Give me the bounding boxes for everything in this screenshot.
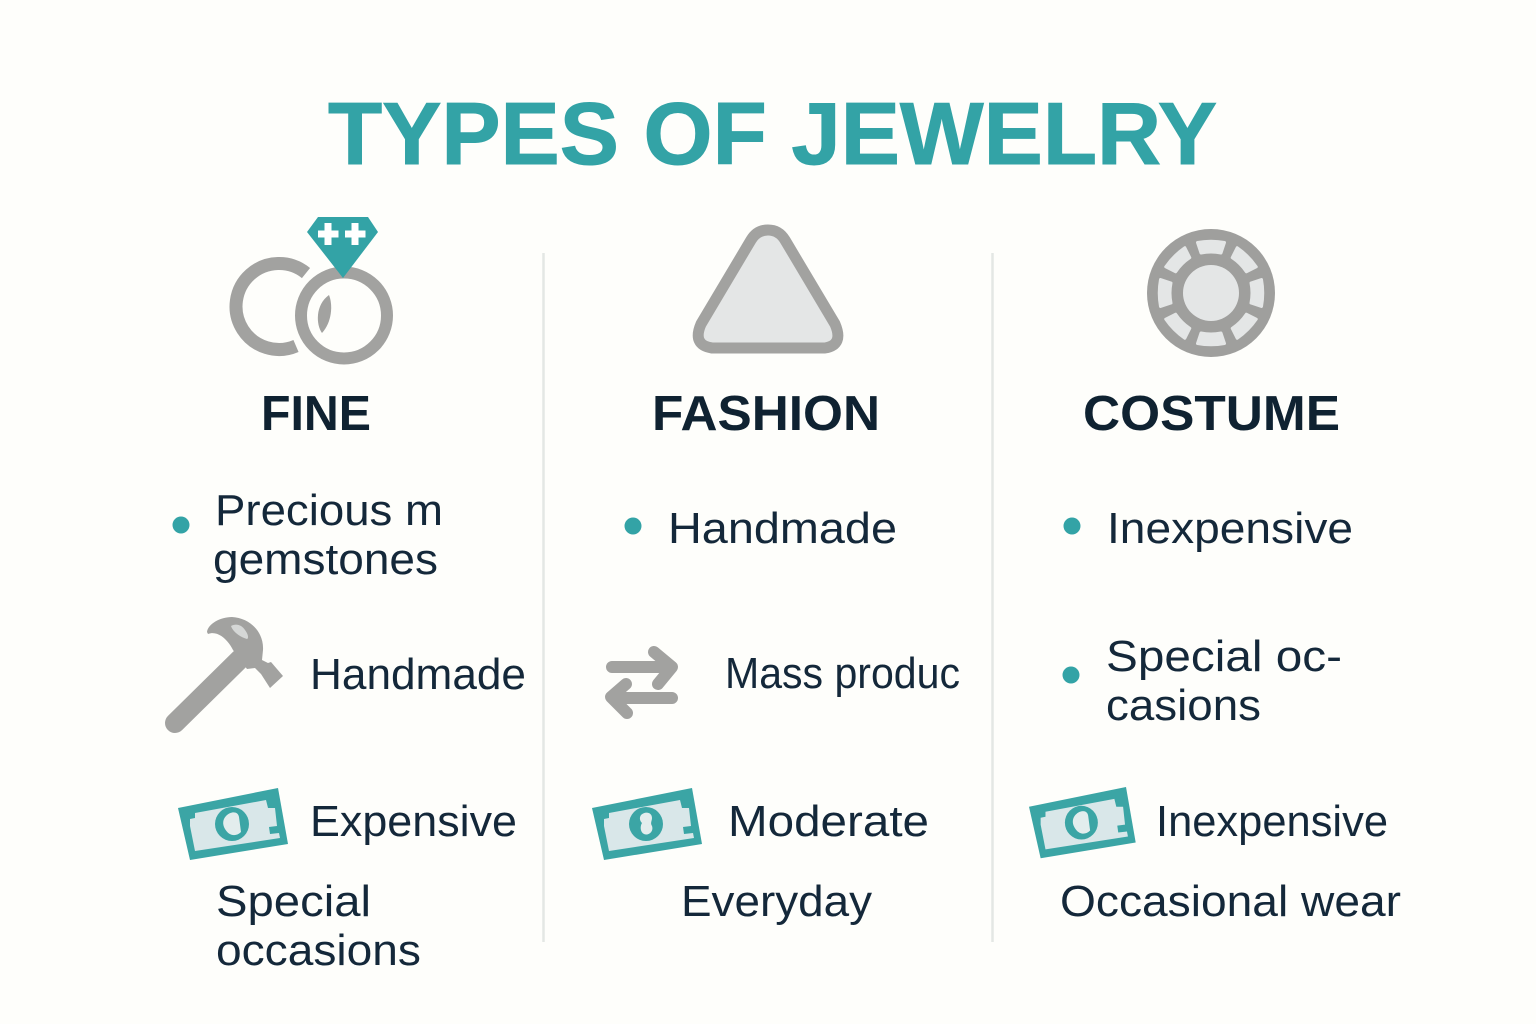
heading: costume: COSTUME bbox=[1083, 387, 1340, 441]
icon: triangle bbox=[698, 230, 838, 348]
text: casions: casions bbox=[1106, 681, 1261, 730]
panel: costume bbox=[1029, 229, 1401, 926]
text: special oc-: Special oc- bbox=[1106, 632, 1342, 681]
text: occasional wear: Occasional wear bbox=[1060, 877, 1401, 926]
title: TYPES OF JEWELRY bbox=[328, 84, 1217, 183]
text: inexpensive: Inexpensive bbox=[1156, 797, 1388, 846]
icon: gem wheel bbox=[1147, 229, 1275, 357]
icon: banknote bbox=[1029, 787, 1136, 858]
panel: fashion bbox=[592, 230, 960, 926]
icon: hammer bbox=[175, 617, 283, 723]
text: everyday: Everyday bbox=[681, 877, 872, 926]
text: gemstones: gemstones bbox=[213, 535, 438, 584]
bullet bbox=[172, 516, 190, 534]
text: special: Special bbox=[216, 877, 371, 926]
text: inexpensive: Inexpensive bbox=[1107, 504, 1353, 553]
text: mass produc: Mass produc bbox=[725, 649, 960, 698]
bullet bbox=[1062, 666, 1080, 684]
text: occasions: occasions bbox=[216, 926, 421, 975]
bullet bbox=[1064, 518, 1080, 534]
text: handmade: Handmade bbox=[310, 650, 526, 699]
panel: fine bbox=[172, 217, 526, 975]
icon: banknote bbox=[178, 788, 288, 860]
bullet bbox=[624, 518, 642, 534]
heading: fine: FINE bbox=[261, 387, 371, 441]
icon: banknote bbox=[592, 788, 702, 860]
heading: fashion: FASHION bbox=[652, 387, 880, 441]
text: precious m: Precious m bbox=[215, 486, 443, 535]
icon: rings with diamond bbox=[236, 217, 387, 358]
text: moderate: Moderate bbox=[728, 797, 929, 846]
text: expensive: Expensive bbox=[310, 797, 517, 846]
text: handmade: Handmade bbox=[668, 504, 897, 553]
icon: swap arrows bbox=[611, 652, 672, 713]
